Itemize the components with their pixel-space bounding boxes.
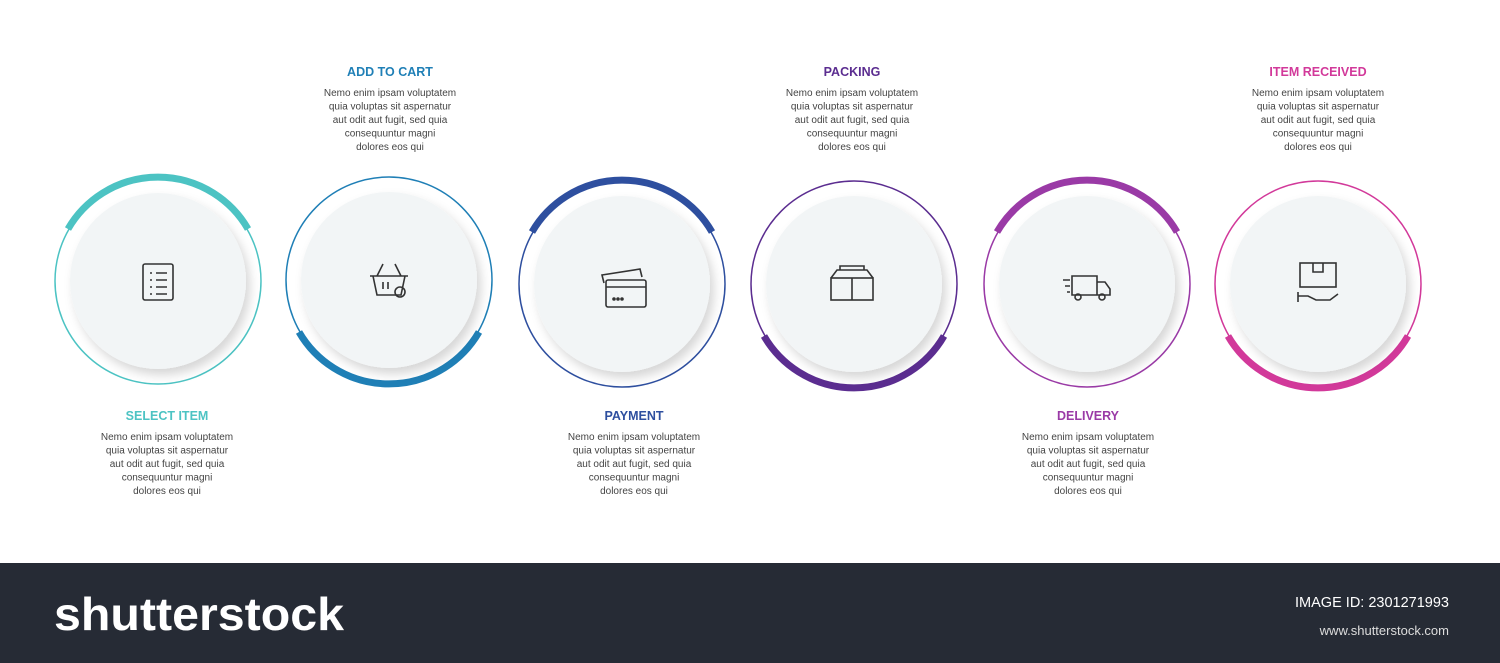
text: packing: consequuntur magni [807,128,897,140]
text: delivery: aut odit aut fugit, sed quia [1031,459,1146,470]
text: delivery: DELIVERY [1057,409,1120,423]
text: payment: consequuntur magni [589,472,679,484]
text: payment: aut odit aut fugit, sed quia [577,459,692,470]
text: select item: Nemo enim ipsam voluptatem [101,432,233,443]
logo: shutterstock [54,588,344,640]
icon: cards [602,269,646,307]
text: payment: quia voluptas sit aspernatur [573,446,696,456]
text: item received [1252,65,1384,153]
text: packing [786,65,918,153]
text: add to cart: consequuntur magni [345,128,435,140]
text: add to cart [324,65,456,153]
text: packing: dolores eos qui [818,142,886,153]
icon: list [143,264,173,300]
text: packing: aut odit aut fugit, sed quia [795,115,910,126]
step 5: delivery [984,180,1190,387]
text: add to cart: aut odit aut fugit, sed quia [333,115,448,126]
text: add to cart: Nemo enim ipsam voluptatem [324,88,456,99]
text: payment: Nemo enim ipsam voluptatem [568,432,700,443]
text: delivery: quia voluptas sit aspernatur [1027,446,1150,456]
image id: IMAGE ID: 2301271993 [1295,595,1449,611]
url: www.shutterstock.com [1319,623,1449,638]
text: payment: PAYMENT [604,409,664,423]
text: add to cart: quia voluptas sit aspernatur [329,102,452,112]
text: item received: quia voluptas sit aspernatur [1257,102,1380,112]
text: item received: consequuntur magni [1273,128,1363,140]
text: packing: quia voluptas sit aspernatur [791,102,914,112]
step 2: add to cart [286,177,492,384]
text: select item: aut odit aut fugit, sed quia [110,459,225,470]
text: payment: dolores eos qui [600,486,668,497]
text: item received: aut odit aut fugit, sed quia [1261,115,1376,126]
text: packing: PACKING [824,65,880,79]
text: item received: dolores eos qui [1284,142,1352,153]
text: add to cart: dolores eos qui [356,142,424,153]
text: payment [568,409,700,497]
text: select item: SELECT ITEM [126,409,208,423]
text: delivery: consequuntur magni [1043,472,1133,484]
step 1: select item [55,177,261,384]
text: delivery: dolores eos qui [1054,486,1122,497]
text: select item [101,409,233,497]
icon: hand with box [1298,263,1338,302]
text: item received: Nemo enim ipsam voluptatem [1252,88,1384,99]
text: item received: ITEM RECEIVED [1269,65,1367,79]
step 3: payment [519,180,725,387]
step 4: packing [751,181,957,388]
text: packing: Nemo enim ipsam voluptatem [786,88,918,99]
step 6: item received [1215,181,1421,388]
icon: truck [1063,276,1110,300]
text: select item: quia voluptas sit aspernatur [106,446,229,456]
text: select item: consequuntur magni [122,472,212,484]
text: delivery: Nemo enim ipsam voluptatem [1022,432,1154,443]
text: add to cart: ADD TO CART [347,65,433,79]
icon: box [831,266,873,300]
footer bar [0,563,1500,663]
text: delivery [1022,409,1154,497]
text: select item: dolores eos qui [133,486,201,497]
icon: basket [370,264,408,297]
